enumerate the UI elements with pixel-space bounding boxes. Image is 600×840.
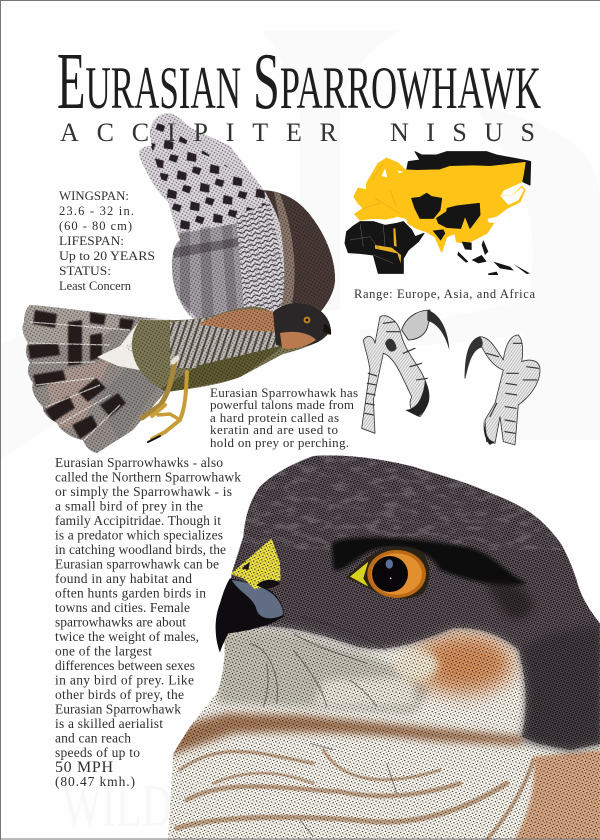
lower-right rufous feathers (513, 750, 600, 840)
body text block: Eurasian sparrowhawk can be (55, 556, 219, 572)
left talon (362, 310, 449, 433)
body text block: towns and cities. Female (55, 600, 190, 615)
wing (139, 113, 336, 319)
body text block: speeds of up to (55, 745, 140, 760)
body text block (55, 455, 241, 789)
beak (216, 578, 284, 653)
stats text block: LIFESPAN: (59, 234, 124, 248)
subtitle: ACCIPITER (60, 118, 338, 147)
stats text block: WINGSPAN: (59, 189, 129, 203)
dark head stipple (231, 455, 600, 750)
body text block: other birds of prey, the (55, 687, 184, 702)
stats text block: STATUS: (59, 264, 111, 278)
breast stripes (177, 750, 533, 840)
map: black interior (412, 193, 442, 218)
body text block: one of the largest (55, 644, 152, 658)
feather marks (250, 617, 397, 837)
body text block: is a skilled aerialist (55, 716, 163, 731)
map: black Africa and Arabia (345, 222, 424, 273)
eye (346, 547, 429, 599)
illustration: talons (362, 310, 540, 445)
talons caption text block: Eurasian Sparrowhawk has (210, 385, 358, 400)
chest stipple (167, 617, 600, 840)
talons caption text block: a hard protein called as (210, 410, 339, 425)
body text block: family Accipitridae. Though it (55, 513, 221, 528)
range caption: Range: Europe, Asia, and Africa (354, 287, 535, 301)
cere (231, 538, 281, 589)
stats text block (59, 189, 155, 293)
map: yellow range (354, 158, 525, 252)
body text block: in catching woodland birds, the (55, 542, 226, 557)
tail (22, 305, 172, 453)
stats text block: (60 - 80 cm) (59, 219, 132, 233)
body text block: (80.47 kmh.) (55, 774, 135, 789)
body text block: called the Northern Sparrowhawk (55, 470, 241, 484)
body text block: a small bird of prey in the (55, 498, 203, 514)
throat (217, 630, 430, 713)
talons caption text block: keratin and are used to (210, 422, 338, 437)
legs (142, 358, 187, 442)
body text block: Eurasian Sparrowhawks - also (55, 455, 223, 470)
stats text block: 23.6 - 32 in. (59, 204, 134, 218)
subtitle (60, 118, 535, 147)
body text block: 50 MPH (55, 759, 113, 776)
illustration: flying sparrowhawk (20, 105, 345, 460)
stats text block: Up to 20 YEARS (59, 249, 155, 263)
body text block: found in any habitat and (55, 571, 192, 586)
dark neck shadow (522, 627, 600, 752)
talons caption text block (210, 385, 358, 450)
map: black Siberia (407, 152, 531, 185)
illustration: hawk head close-up (167, 443, 600, 840)
body text block: and can reach (55, 730, 131, 746)
head plumage (167, 443, 600, 840)
dark head base (220, 443, 600, 750)
body (132, 302, 331, 392)
body text block: Eurasian Sparrowhawk (55, 702, 181, 716)
talons caption text block: powerful talons made from (210, 397, 354, 412)
brow mask (332, 537, 527, 585)
body text block: often hunts garden birds in (55, 586, 206, 600)
stats text block: Least Concern (59, 279, 132, 293)
body text block: twice the weight of males, (55, 629, 199, 644)
body text block: differences between sexes (55, 658, 195, 673)
talons caption text block: hold on prey or perching. (210, 435, 349, 450)
subtitle: NISUS (390, 118, 535, 147)
beak (323, 324, 331, 335)
title (57, 38, 541, 126)
body text block: in any bird of prey. Like (55, 672, 194, 688)
body text block: is a predator which specializes (55, 528, 223, 542)
title: EURASIAN (57, 38, 241, 126)
body text block: sparrowhawks are about (55, 614, 186, 630)
range map (345, 152, 531, 275)
cheek peach patch (413, 633, 513, 693)
head mottling (242, 456, 563, 550)
background watermark: WILD (62, 773, 172, 839)
right talon (465, 335, 540, 445)
body text block: or simply the Sparrowhawk - is (55, 484, 232, 499)
